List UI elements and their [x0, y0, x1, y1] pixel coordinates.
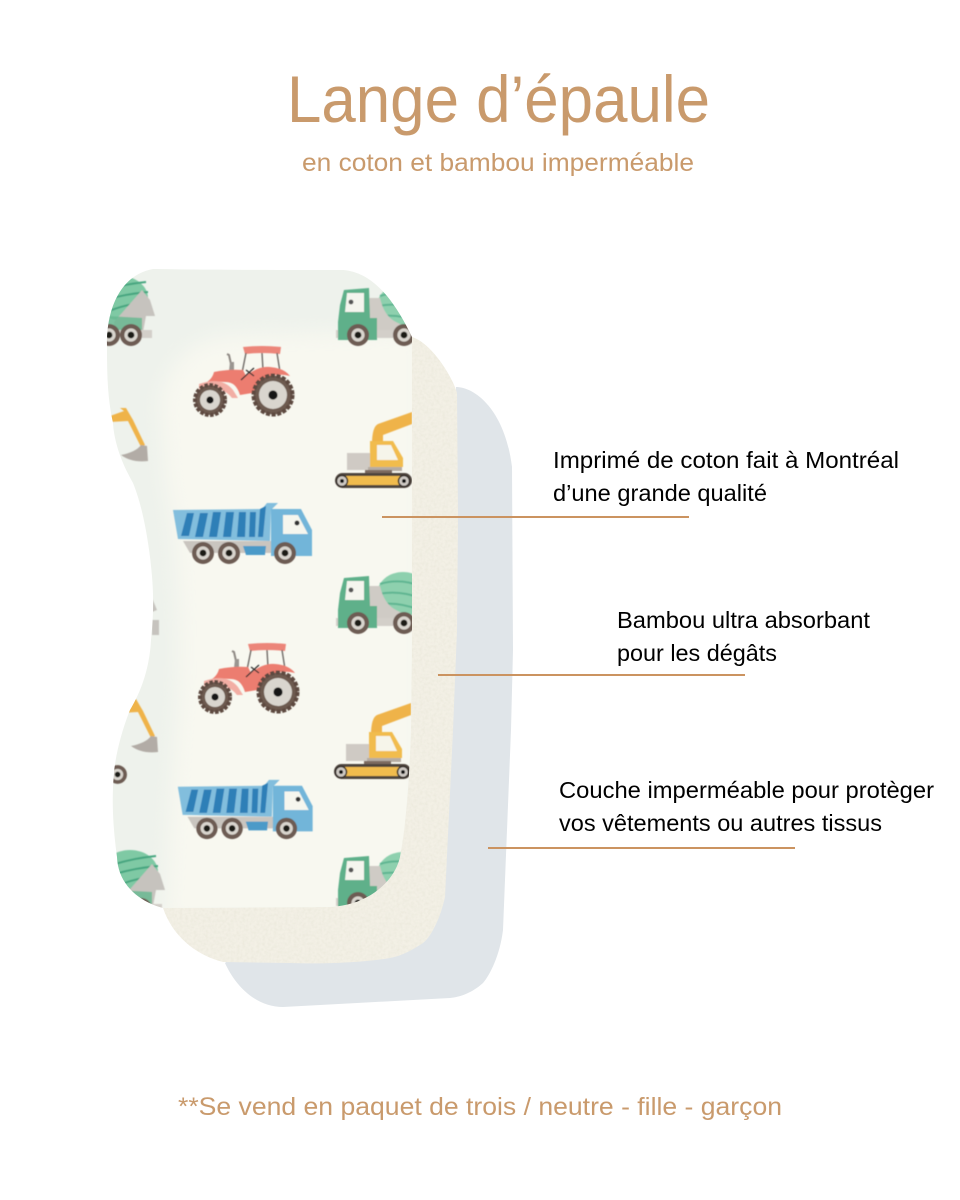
- icon: excavator upper: [335, 412, 412, 488]
- icon: dump truck upper: [173, 503, 312, 564]
- title: Lange d’épaule: [287, 62, 710, 136]
- callout line 1: [382, 516, 689, 518]
- icon: mixer left bottom: [116, 849, 166, 908]
- icon: dump truck lower: [178, 780, 313, 839]
- icon: mixer right top: [336, 287, 412, 347]
- callout line 3: [488, 847, 795, 849]
- icon: excavator bucket lower: [128, 698, 158, 753]
- layer: printed cotton: [106, 269, 412, 908]
- callout: bamboo: [617, 607, 871, 666]
- icon: tractor upper: [195, 346, 292, 415]
- layer: bamboo fleece: [163, 337, 458, 963]
- callout: cotton print: [553, 447, 899, 506]
- icon: partial mixer chute: [152, 598, 159, 635]
- callout line 2: [438, 674, 745, 676]
- vehicle pattern: [106, 278, 412, 908]
- footer note: **Se vend en paquet de trois / neutre - fille - garçon: [178, 1093, 782, 1121]
- callout: bamboo: Bambou ultra absorbant: [617, 607, 871, 633]
- callout: waterproof layer: vos vêtements ou autres tissus: [559, 810, 882, 836]
- icon: mixer right bottom: [336, 852, 401, 906]
- layer: waterproof backing: [225, 387, 513, 1007]
- callout: bamboo: pour les dégâts: [617, 640, 777, 666]
- callout: cotton print: d’une grande qualité: [553, 480, 767, 506]
- subtitle: en coton et bambou imperméable: [302, 149, 694, 177]
- icon: partial wheel: [108, 765, 127, 784]
- icon: mixer right middle: [336, 571, 412, 635]
- callout: waterproof layer: Couche imperméable pour protèger: [559, 777, 934, 803]
- icon: excavator lower: [334, 703, 411, 779]
- callout: waterproof layer: [559, 777, 934, 836]
- product: burp cloth layers: [92, 260, 513, 1007]
- icon: excavator bucket upper: [110, 408, 148, 461]
- icon: mixer left top: [106, 278, 156, 347]
- icon: tractor lower: [200, 643, 298, 712]
- callout: cotton print: Imprimé de coton fait à Montréal: [553, 447, 899, 473]
